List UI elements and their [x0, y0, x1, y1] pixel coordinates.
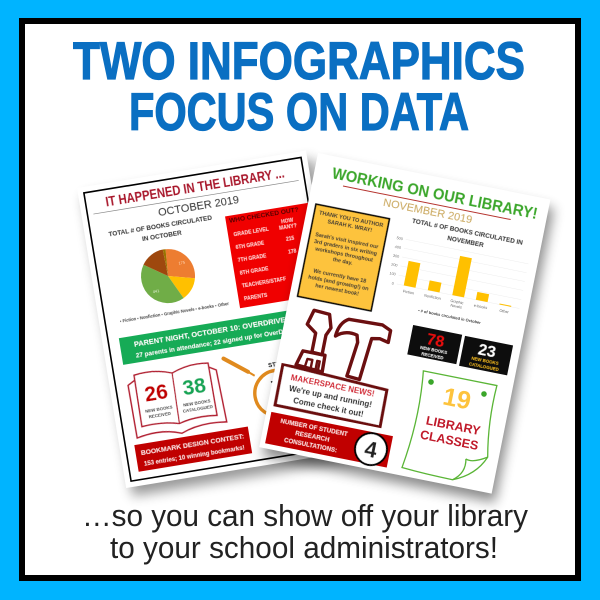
stat: books received: NEW BOOKS — [420, 345, 448, 355]
panel: who checked out: TEACHERS/STAFF — [242, 276, 287, 290]
icon: hammer — [328, 316, 391, 384]
panel: author thank-you note: SARAH K. WRAY! — [327, 219, 373, 234]
bar chart: Other — [499, 309, 510, 315]
panel: author thank-you note: We currently have 18 — [313, 268, 367, 285]
pie legend: ▪ Fiction ▪ Nonfiction ▪ Graphic Novels ▪ e-books ▪ Other — [120, 301, 230, 324]
icon: open book with counts: 38 — [181, 374, 208, 400]
panel: November infographic page — [258, 153, 555, 502]
October heading: IT HAPPENED IN THE LIBRARY ... — [104, 164, 285, 209]
pie chart title: IN OCTOBER — [142, 230, 183, 243]
bar chart: ▪ # of books circulated in October — [418, 308, 482, 325]
panel: makerspace news: Come check it out! — [292, 396, 364, 419]
icon: screwdriver — [296, 309, 334, 372]
bar chart title: TOTAL # OF BOOKS CIRCULATED IN — [411, 218, 524, 247]
bar chart: Nonfiction — [424, 294, 441, 301]
icon: open book with counts: RECEIVED — [148, 411, 171, 419]
panel: library classes note: 19 — [441, 383, 473, 415]
panel: who checked out: GRADE LEVEL — [233, 227, 269, 238]
pie chart — [137, 245, 199, 307]
caption: to your school administrators! — [110, 530, 498, 565]
panel: author thank-you note: Sarah's visit inspired our — [315, 232, 380, 251]
bar chart: 500 — [396, 236, 403, 241]
panel: who checked out: 178 — [288, 248, 297, 256]
panel: who checked out: 6TH GRADE — [235, 240, 265, 251]
caption: …so you can show off your library — [82, 498, 528, 533]
bar chart: Novels — [450, 303, 462, 310]
panel: October infographic page — [77, 150, 361, 497]
panel: research consultations: NUMBER OF STUDENT — [280, 418, 348, 438]
October date: OCTOBER 2019 — [157, 194, 240, 219]
pie chart title — [108, 215, 215, 248]
caption — [82, 498, 528, 565]
panel: author thank-you note: workshops throughout — [314, 246, 374, 264]
icon: open book with counts: CATALOGUED — [182, 404, 213, 414]
panel: who checked out — [225, 203, 323, 308]
panel: parent night — [119, 304, 334, 365]
panel: who checked out: PARENTS — [244, 293, 269, 302]
icon: open book with counts: NEW BOOKS — [183, 398, 211, 408]
icon: open book with counts: NEW BOOKS — [145, 404, 173, 414]
stat: books catalogued — [459, 336, 513, 375]
panel: library classes note: CLASSES — [419, 428, 480, 453]
panel: author thank-you note: 3rd graders in six writing — [313, 239, 377, 257]
pie chart: 175 — [178, 259, 186, 266]
bar chart: Graphic — [450, 299, 464, 305]
icon: magnifying glass: STUDENT — [268, 359, 297, 369]
panel: author thank-you note: the day. — [332, 257, 353, 267]
panel: research consultations: RESEARCH — [295, 430, 330, 444]
pie chart: 441 — [152, 288, 160, 294]
icon: open book with counts: 26 — [143, 380, 170, 407]
panel: author thank-you note: holds (and growing!) on — [308, 275, 369, 292]
panel: who checked out: 7TH GRADE — [237, 253, 268, 264]
bar chart — [383, 236, 529, 332]
stat: books received — [407, 325, 462, 364]
stat: books catalogued: CATALOGUED — [468, 361, 499, 372]
panel: who checked out: MANY? — [279, 223, 297, 232]
panel: bookmark contest — [134, 427, 252, 472]
panel: research consultations: 4 — [362, 436, 380, 463]
bar chart: Fiction — [403, 289, 414, 295]
bar chart: 0 — [391, 282, 394, 286]
bar chart title: NOVEMBER — [447, 235, 485, 249]
panel: research consultations: CONSULTATIONS: — [283, 437, 338, 454]
November heading: WORKING ON OUR LIBRARY! — [331, 165, 539, 223]
panel: author thank-you note: THANK YOU TO AUTHOR — [319, 210, 384, 229]
bar chart: e-books — [473, 304, 488, 310]
bar chart: 100 — [389, 271, 396, 277]
panel: author thank-you note: her newest book! — [315, 283, 359, 298]
panel: makerspace news — [275, 364, 388, 427]
panel: makerspace news: MAKERSPACE NEWS! — [290, 373, 375, 399]
panel: parent night: PARENT NIGHT, OCTOBER 10: OVERDRIVE WORKSHOP — [133, 308, 332, 349]
pie chart title: TOTAL # OF BOOKS CIRCULATED — [108, 215, 213, 238]
panel: author thank-you note — [298, 204, 389, 311]
stat: books received: 78 — [425, 331, 446, 351]
panel: who checked out: WHO CHECKED OUT? — [229, 207, 299, 225]
stat: books received: RECEIVED — [421, 351, 444, 361]
panel: makerspace news: We're up and running! — [288, 384, 373, 409]
panel: parent night: 27 parents in attendance; 22 signed up for OverDrive — [135, 327, 295, 360]
panel: who checked out: HOW — [281, 217, 294, 225]
bar chart: 200 — [391, 263, 398, 268]
panel: bookmark contest: 153 entries; 10 winning bookmarks! — [144, 445, 245, 468]
panel: bookmark contest: BOOKMARK DESIGN CONTEST: — [140, 433, 245, 457]
panel: who checked out: 8TH GRADE — [240, 266, 270, 277]
stat: books catalogued: NEW BOOKS — [471, 356, 499, 366]
November date: NOVEMBER 2019 — [382, 197, 473, 226]
bar chart: 400 — [394, 245, 401, 250]
stat: books catalogued: 23 — [476, 341, 497, 362]
panel: who checked out: 215 — [286, 236, 295, 243]
panel: research consultations — [265, 412, 393, 469]
panel: library classes note: LIBRARY — [425, 414, 482, 438]
title — [73, 32, 525, 142]
bar chart: 300 — [393, 254, 400, 259]
icon: magnifying glass — [223, 347, 305, 424]
icon: open book with counts — [126, 361, 227, 441]
panel: library classes note — [402, 370, 502, 486]
title: FOCUS ON DATA — [129, 83, 469, 142]
